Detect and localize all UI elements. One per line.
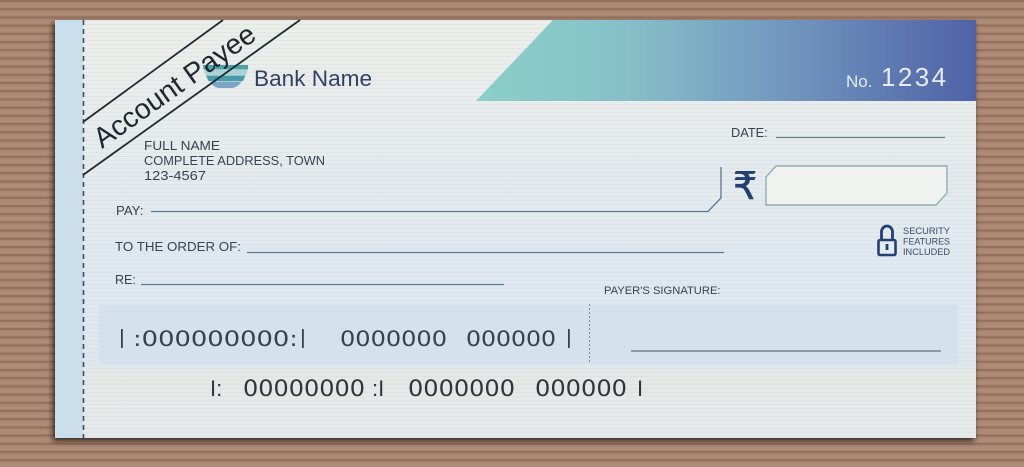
- icon: padlock: [878, 226, 896, 255]
- micr code line one: 000000: [466, 327, 556, 351]
- micr code line two: I:: [210, 376, 222, 401]
- account holder details: [144, 138, 325, 183]
- amount box: [766, 166, 947, 205]
- account holder details: COMPLETE ADDRESS, TOWN: [144, 153, 325, 168]
- micr code line one: :000000000:: [133, 327, 298, 351]
- security features note: INCLUDED: [903, 247, 951, 257]
- micr code line one: [121, 327, 570, 351]
- pay line: [116, 167, 721, 218]
- security features note: FEATURES: [903, 236, 950, 246]
- micr code line two: [210, 376, 643, 402]
- cheque number: 1234: [881, 62, 948, 92]
- to the order of line: TO THE ORDER OF:: [115, 239, 241, 254]
- micr security band: [99, 305, 958, 364]
- account holder details: FULL NAME: [144, 138, 220, 153]
- micr code line two: I: [637, 376, 643, 401]
- micr code line two: 00000000: [243, 377, 365, 402]
- cheque number: No.: [846, 72, 872, 91]
- payer's signature: PAYER'S SIGNATURE:: [604, 285, 721, 297]
- account holder details: 123-4567: [144, 168, 206, 183]
- micr code line two: :I: [372, 376, 384, 401]
- micr code line two: 0000000: [408, 377, 515, 402]
- cheque number: [846, 62, 948, 92]
- icon: rupee symbol: ₹: [733, 164, 757, 208]
- micr code line two: 000000: [535, 377, 627, 402]
- bank name: Bank Name: [254, 66, 372, 91]
- security features note: SECURITY: [903, 226, 950, 236]
- cheque stub strip: [55, 20, 83, 438]
- account payee crossing: [83, 18, 300, 175]
- account payee crossing: Account Payee: [88, 18, 262, 155]
- micr code line one: 0000000: [340, 327, 447, 351]
- top colour band: [476, 20, 976, 101]
- pay line: PAY:: [116, 203, 143, 218]
- date field: DATE:: [731, 125, 768, 140]
- icon: bank logo: [203, 65, 248, 88]
- re line: RE:: [115, 273, 136, 287]
- security features note: [903, 226, 951, 257]
